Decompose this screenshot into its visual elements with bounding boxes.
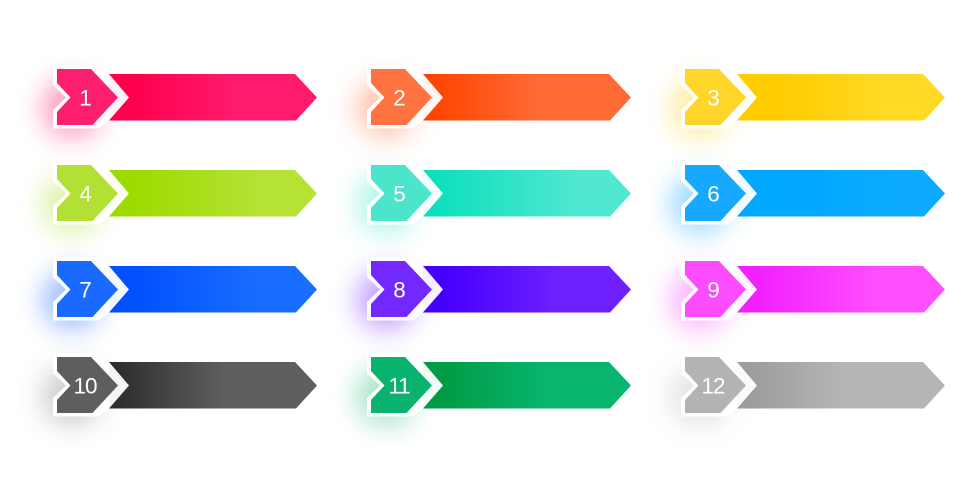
banner 5 (356, 161, 631, 234)
banner 5: 5 (393, 182, 406, 206)
banner 7 (42, 257, 317, 330)
banner 4: 4 (79, 182, 92, 206)
banner 8: 8 (393, 278, 406, 302)
banner 11 (356, 353, 631, 426)
banner 12 (670, 353, 945, 426)
banner 4 (42, 161, 317, 234)
banner 12: 12 (701, 374, 725, 398)
banner 8 (356, 257, 631, 330)
banner 9: 9 (707, 278, 720, 302)
banner 3 (670, 65, 945, 138)
banner 2 (356, 65, 631, 138)
banner 9 (670, 257, 945, 330)
banner 11: 11 (388, 374, 410, 398)
banner 2: 2 (393, 86, 406, 110)
banner 1: 1 (79, 86, 92, 110)
banner 6: 6 (707, 182, 720, 206)
banner 10 (42, 353, 317, 426)
banner 1 (42, 65, 317, 138)
banner 6 (670, 161, 945, 234)
banner 7: 7 (79, 278, 92, 302)
banner 10: 10 (73, 374, 97, 398)
banner 3: 3 (707, 86, 720, 110)
